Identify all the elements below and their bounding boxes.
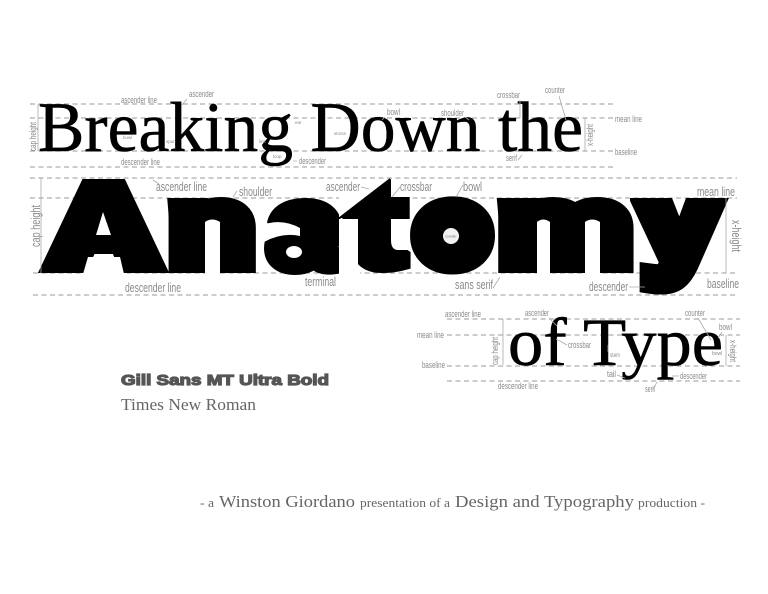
credit line: Winston Giordano bbox=[219, 492, 355, 511]
annotations: anatomy: baseline bbox=[707, 276, 739, 291]
heading: of Type: of Type bbox=[508, 304, 723, 380]
heading: Anatomy: y bbox=[645, 169, 713, 285]
annotations: title: x-height bbox=[585, 124, 595, 146]
annotations: anatomy: bowl bbox=[463, 179, 482, 194]
annotations: title: stress bbox=[334, 131, 347, 136]
annotations: of type: crossbar bbox=[568, 340, 591, 350]
guide lines: of type bbox=[447, 319, 740, 381]
annotations: of type: bowl bbox=[719, 322, 732, 332]
guide line: anatomy top bbox=[30, 177, 737, 179]
annotations: of type: baseline bbox=[422, 360, 445, 370]
annotations: title: link bbox=[259, 139, 267, 144]
heading: Breaking Down the: Breaking Down the bbox=[38, 89, 583, 167]
annotations: title: cap height bbox=[28, 122, 38, 151]
heading: Anatomy: t bbox=[352, 157, 401, 289]
annotations: anatomy: ascender bbox=[326, 179, 360, 194]
heading: Anatomy: A bbox=[53, 166, 154, 286]
annotations: of type bbox=[417, 308, 738, 394]
annotations: title: spur bbox=[166, 139, 175, 144]
guide lines: title bbox=[30, 104, 613, 167]
heading: Anatomy: m bbox=[502, 170, 629, 286]
credit line: production - bbox=[638, 495, 705, 510]
annotations: anatomy: sans serif bbox=[455, 277, 493, 292]
annotations: of type: stem bbox=[610, 353, 620, 359]
heading: Anatomy: o bbox=[429, 190, 476, 269]
annotations: title: baseline bbox=[615, 147, 637, 157]
annotations: of type: descender line bbox=[498, 381, 538, 391]
annotations: title: crossbar bbox=[497, 90, 520, 100]
credit line: - a bbox=[200, 495, 214, 510]
annotations: of type: counter bbox=[685, 308, 705, 318]
annotations: of type: ascender line bbox=[445, 309, 481, 319]
annotations: anatomy: descender bbox=[589, 279, 628, 294]
annotations: title: descender bbox=[299, 156, 326, 166]
guide lines: anatomy bbox=[30, 198, 738, 295]
annotations: of type: descender bbox=[680, 371, 707, 381]
annotations: title: bowl bbox=[123, 135, 132, 140]
heading: Anatomy bbox=[53, 157, 713, 289]
annotations: of type: mean line bbox=[417, 330, 444, 340]
annotations: anatomy: crossbar bbox=[400, 179, 432, 194]
annotations: title: ear bbox=[295, 120, 302, 125]
annotations: title: shoulder bbox=[441, 108, 464, 118]
heading: Anatomy: a bbox=[272, 170, 340, 286]
annotations: anatomy: shoulder bbox=[239, 184, 272, 199]
annotations: of type: bowl bbox=[712, 351, 722, 357]
credit line: Design and Typography bbox=[455, 492, 635, 511]
legend: Gill Sans MT Ultra Bold: Gill Sans MT Ultra Bold bbox=[121, 372, 329, 389]
annotations: title: bowl bbox=[387, 107, 400, 117]
annotations: title: mean line bbox=[615, 114, 642, 124]
annotations: anatomy: mean line bbox=[697, 184, 735, 199]
annotations: of type: x-height bbox=[728, 340, 738, 362]
credit line: presentation of a bbox=[360, 495, 450, 510]
annotations: of type: ascender bbox=[525, 308, 549, 318]
annotations: title: ascender line bbox=[121, 95, 157, 105]
annotations: title: counter bbox=[545, 85, 565, 95]
annotations: title: descender line bbox=[121, 157, 160, 167]
annotations: anatomy: counter bbox=[445, 234, 458, 238]
annotations: title: loop bbox=[273, 154, 282, 159]
annotations: anatomy bbox=[28, 178, 744, 295]
legend: Times New Roman: Times New Roman bbox=[121, 395, 257, 414]
annotations: anatomy: ascender line bbox=[156, 179, 207, 194]
annotations: anatomy: descender line bbox=[125, 280, 181, 295]
annotations: of type: tail bbox=[607, 369, 616, 379]
annotations: title: serif bbox=[506, 153, 517, 163]
heading: Anatomy: n bbox=[172, 168, 251, 285]
annotations: anatomy: terminal bbox=[305, 274, 336, 289]
credit line bbox=[200, 492, 705, 511]
annotations: anatomy: x-height bbox=[729, 220, 744, 252]
annotations: anatomy: cap height bbox=[28, 205, 43, 247]
annotations: title bbox=[28, 85, 642, 167]
annotations: of type: cap height bbox=[490, 337, 500, 365]
annotations: of type: serif bbox=[645, 384, 655, 394]
annotations: title: ascender bbox=[189, 89, 214, 99]
